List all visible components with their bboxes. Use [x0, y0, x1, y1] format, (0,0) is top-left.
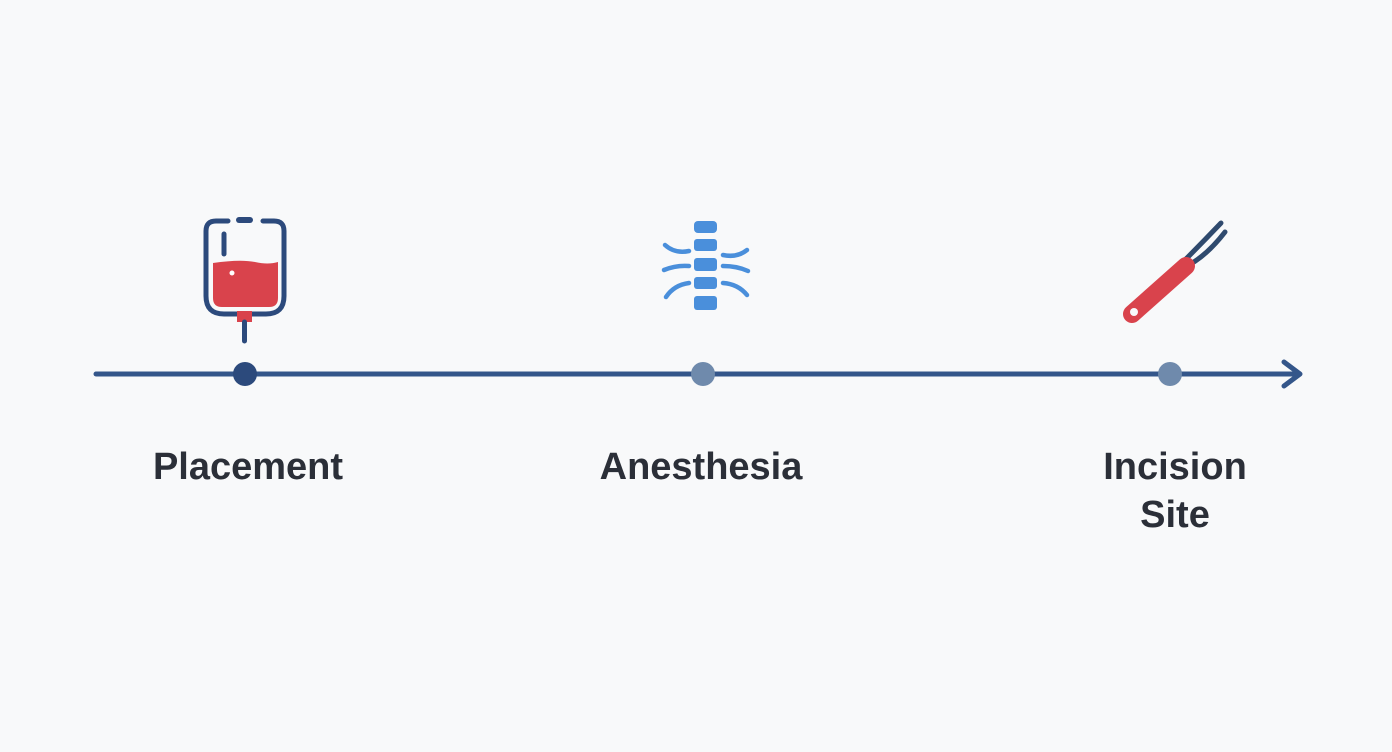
icon: spine — [664, 221, 748, 310]
label: Anesthesia: Anesthesia — [600, 446, 803, 488]
dot: placement — [233, 362, 257, 386]
label: Placement: Placement — [153, 446, 343, 488]
icon: IV bag — [206, 220, 284, 341]
label: Incision Site: Site — [1140, 494, 1210, 536]
label: Incision Site: Incision — [1103, 446, 1247, 488]
dot: anesthesia — [691, 362, 715, 386]
timeline arrow — [96, 362, 1300, 386]
icon: scalpel — [1130, 223, 1225, 316]
dot: incision — [1158, 362, 1182, 386]
